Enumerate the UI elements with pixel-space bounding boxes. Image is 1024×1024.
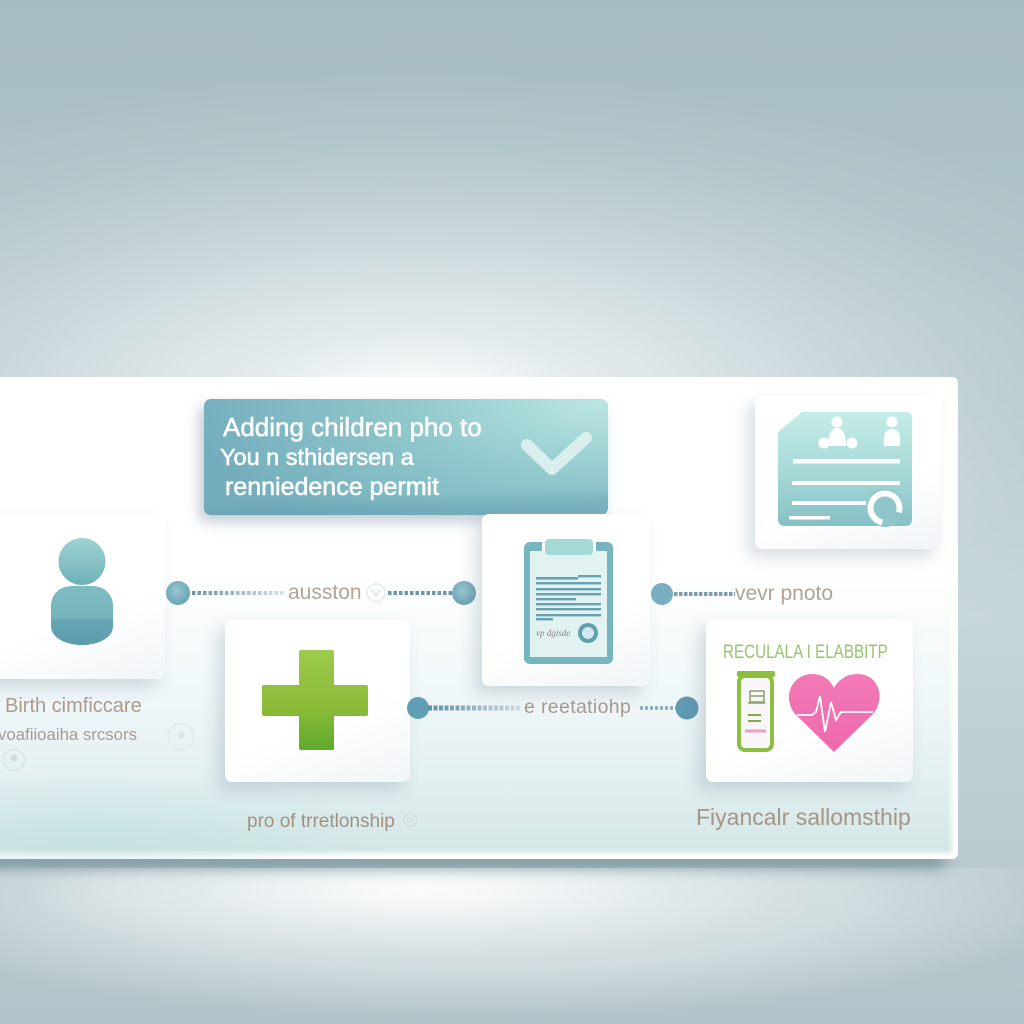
- title text: renniedence permit: [225, 473, 439, 501]
- label: proof of relationship: pro of trretlonship: [247, 811, 395, 832]
- connector label: ausston: ausston: [288, 581, 362, 604]
- title text: You n sthidersen a: [220, 444, 414, 470]
- icon: green cross: [262, 650, 368, 750]
- label: financial relationship: Fiyancalr sallomsthip: [696, 804, 911, 830]
- panel shadow: [0, 853, 945, 868]
- icon: person: [51, 538, 113, 645]
- connector label: vevr photo: vevr pnoto: [735, 582, 833, 605]
- icon: faint badge: [403, 813, 417, 827]
- title text: Adding children pho to: [223, 412, 482, 442]
- card: person: [0, 514, 165, 679]
- card: certificate top right: [755, 396, 941, 549]
- card: health: [706, 619, 913, 782]
- icon: family certificate: [778, 412, 912, 527]
- signature: vp dgisde: [536, 628, 570, 638]
- icon: faint badge right: [168, 724, 194, 750]
- connector label: relationship: e reetatiohp: [524, 696, 631, 718]
- connector: plus to health card: [407, 696, 698, 720]
- connector: clipboard to health card: [651, 583, 735, 605]
- icon: faint badge left: [3, 749, 25, 771]
- health heading: RECULALA I ELABBITP: [723, 642, 888, 663]
- icon: heart with pulse: [788, 674, 880, 752]
- floor reflection: [0, 868, 1024, 1024]
- card: clipboard: [482, 514, 650, 686]
- connector: person to clipboard: [166, 581, 476, 605]
- label: birth certificate: Birth cimficcare: [5, 695, 142, 717]
- panel: main white board: [0, 377, 958, 859]
- card: green plus: [225, 620, 410, 782]
- icon: faint badge: [366, 583, 386, 603]
- icon: check mark: [521, 432, 592, 475]
- title text: [220, 412, 482, 501]
- icon: clipboard document: [524, 539, 613, 664]
- title banner: [204, 399, 608, 515]
- icon: green jar: [737, 671, 775, 752]
- label: birth subtext: voafiioaiha srcsors: [0, 725, 137, 744]
